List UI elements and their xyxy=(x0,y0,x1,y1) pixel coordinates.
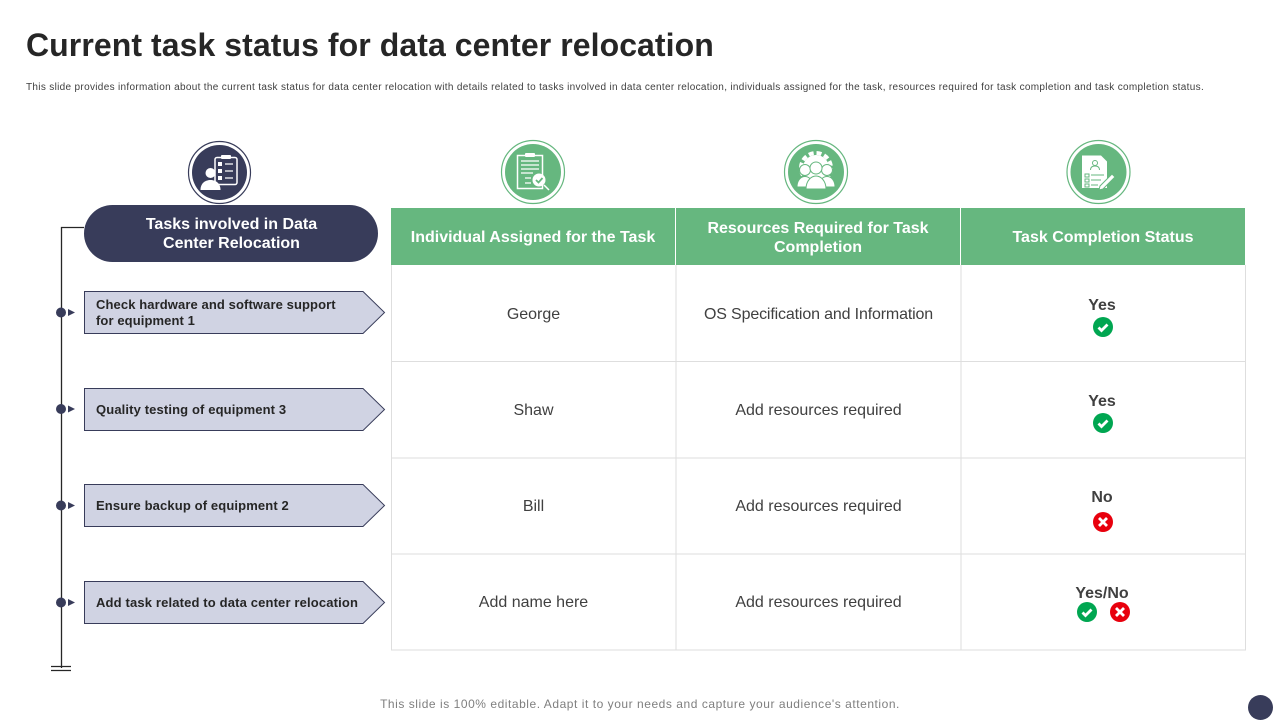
row 4 status: Yes/No xyxy=(1075,585,1129,602)
row 1 resource: OS Specification and Information xyxy=(704,306,933,323)
heading pill text: Tasks involved in Data xyxy=(146,216,317,232)
task arrow 2 xyxy=(84,388,386,431)
row 3 status: No xyxy=(1091,489,1113,506)
icon: team with gear xyxy=(784,140,848,204)
row 2 individual: Shaw xyxy=(513,402,554,419)
icon: tasks clipboard with person xyxy=(188,140,252,204)
table header: resources xyxy=(676,208,960,265)
row 2 status: Yes xyxy=(1088,393,1116,410)
footer note: This slide is 100% editable. Adapt it to your needs and capture your audience's attention. xyxy=(380,697,900,711)
icon: clipboard with magnifier xyxy=(500,140,566,204)
page dot xyxy=(1248,695,1273,720)
title: Current task status for data center relocation xyxy=(26,27,714,63)
task label 1: Check hardware and software support xyxy=(96,297,336,312)
task arrow 1 xyxy=(84,291,386,334)
icon: green check row 4 xyxy=(1077,602,1097,622)
description text: This slide provides information about the current task status for data center relocation with details related to tasks involved in data center relocation, individuals assigned for the task, resources required for task completion and task completion status. xyxy=(26,82,1204,93)
icon: red cross row 4 xyxy=(1110,602,1130,622)
row 2 resource: Add resources required xyxy=(735,402,902,419)
heading pill text xyxy=(146,216,318,252)
heading pill: tasks xyxy=(84,205,378,262)
task arrow 3 xyxy=(84,484,386,527)
task label 3: Ensure backup of equipment 2 xyxy=(96,498,289,513)
row 1 individual: George xyxy=(507,306,560,323)
row 3 individual: Bill xyxy=(523,498,544,515)
task label 2: Quality testing of equipment 3 xyxy=(96,402,286,417)
heading pill text: Center Relocation xyxy=(163,234,300,252)
row 4 individual: Add name here xyxy=(479,594,588,611)
table grid xyxy=(391,265,1246,650)
task label 4: Add task related to data center relocation xyxy=(96,595,358,610)
icon: red cross row 3 xyxy=(1093,512,1113,532)
icon: form with pen xyxy=(1066,140,1131,204)
table header: resources: Resources Required for Task Completion xyxy=(707,220,929,256)
table header: individual: Individual Assigned for the Task xyxy=(411,229,655,246)
row 1 status: Yes xyxy=(1088,297,1116,314)
task label 1 xyxy=(96,297,336,328)
table header: individual xyxy=(391,208,675,265)
table header: status xyxy=(961,208,1245,265)
row 4 resource: Add resources required xyxy=(735,594,902,611)
icon: green check row 1 xyxy=(1093,317,1113,337)
table header: status: Task Completion Status xyxy=(1012,229,1194,246)
timeline connector xyxy=(51,226,84,672)
task label 1: for equipment 1 xyxy=(96,313,195,328)
row 3 resource: Add resources required xyxy=(735,498,902,515)
icon: green check row 2 xyxy=(1093,413,1113,433)
task arrow 4 xyxy=(84,581,386,624)
